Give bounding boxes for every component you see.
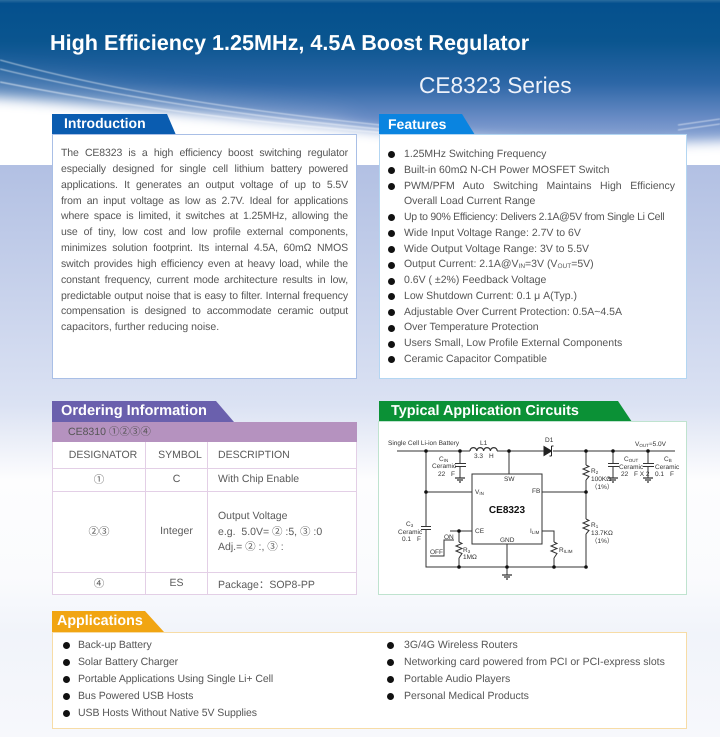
panel: applications bbox=[52, 611, 687, 729]
heading: introduction: Introduction bbox=[64, 115, 146, 131]
text block: introduction body: especially designed for single cell lithium battery powered bbox=[61, 163, 348, 175]
text block: introduction body: where space is limited, it switches at 1.25MHz, allowing the bbox=[61, 210, 348, 222]
circuit labels: （1%） bbox=[591, 537, 613, 545]
row: designator 4: Package：SOP8-PP bbox=[218, 579, 315, 591]
circuit labels: OFF bbox=[430, 549, 443, 556]
row: designator 1: ① bbox=[94, 474, 104, 486]
list: applications left: Solar Battery Charger bbox=[78, 656, 178, 668]
header row: DESIGNATOR bbox=[69, 449, 137, 461]
circuit labels: GND bbox=[500, 537, 515, 544]
circuit labels: Single Cell Li-ion Battery bbox=[388, 440, 460, 447]
circuit labels: R bbox=[559, 547, 564, 554]
list: applications left: Back-up Battery bbox=[78, 639, 152, 651]
feature list: 1.25MHz Switching Frequency bbox=[404, 148, 546, 160]
list: applications left: Bus Powered USB Hosts bbox=[78, 690, 193, 702]
circuit labels bbox=[388, 437, 680, 561]
feature list bbox=[388, 148, 675, 365]
circuit labels: OUT bbox=[629, 458, 638, 463]
text block: introduction body: predictable output noise that is easy to filter. Internal frequency bbox=[61, 290, 348, 302]
circuit labels: IN bbox=[479, 491, 484, 496]
circuit labels: 1 bbox=[596, 524, 599, 529]
circuit labels: 3 bbox=[468, 549, 471, 554]
heading: ordering information bbox=[52, 401, 234, 422]
list: applications right: 3G/4G Wireless Routers bbox=[404, 639, 518, 651]
circuit labels: V bbox=[635, 441, 639, 448]
circuit labels: 2 bbox=[596, 470, 599, 475]
ground symbols bbox=[455, 478, 653, 579]
heading: applications bbox=[52, 611, 164, 632]
list: applications right: Personal Medical Products bbox=[404, 690, 529, 702]
circuit labels: Ceramic bbox=[432, 463, 457, 470]
row: designator 4 bbox=[94, 577, 315, 591]
header row: DESCRIPTION bbox=[218, 449, 290, 461]
text block: introduction body: capacitors, further reducing noise. bbox=[61, 321, 219, 333]
inductor L1 bbox=[470, 448, 497, 451]
row: designators 2 and 3: Integer bbox=[160, 525, 193, 537]
feature list: Output Current: 2.1A@VIN=3V (VOUT=5V) bbox=[404, 258, 594, 270]
text block: introduction body: compensation is designed to accommodate ceramic output bbox=[61, 305, 348, 317]
chip: CE8323 bbox=[472, 474, 542, 544]
circuit labels: R bbox=[591, 522, 596, 529]
circuit labels: Ceramic bbox=[619, 464, 644, 471]
text block: introduction body: use of tiny, low cost and low profile external components, bbox=[61, 226, 348, 238]
circuit labels: LIM bbox=[532, 530, 540, 535]
heading: typical application circuits bbox=[379, 401, 632, 422]
feature list: Users Small, Low Profile External Components bbox=[404, 337, 622, 349]
part number band bbox=[52, 422, 357, 442]
circuit labels: F X 2 bbox=[634, 471, 650, 478]
circuit labels: B bbox=[669, 458, 672, 463]
applications box bbox=[52, 632, 687, 729]
resistors bbox=[456, 465, 589, 558]
feature list: Adjustable Over Current Protection: 0.5A~4.5A bbox=[404, 306, 622, 318]
circuit labels: D1 bbox=[545, 437, 554, 444]
circuit labels: SW bbox=[504, 476, 515, 483]
circuit labels: 13.7KΩ bbox=[591, 530, 613, 537]
circuit labels: （1%） bbox=[591, 483, 613, 491]
list: applications right: Networking card powered from PCI or PCI-express slots bbox=[404, 656, 665, 668]
row: designators 2 and 3: e.g. 5.0V= ② :5, ③ :0 bbox=[218, 526, 322, 538]
row: designator 4: ES bbox=[169, 577, 184, 589]
circuit labels: 1MΩ bbox=[463, 554, 477, 561]
circuit labels: 22 bbox=[438, 471, 446, 478]
part number band: CE8310 ①②③④ bbox=[68, 426, 151, 438]
chip: CE8323: CE8323 bbox=[489, 505, 526, 516]
panel: typical application circuits bbox=[378, 401, 687, 595]
heading: introduction bbox=[52, 114, 176, 135]
list: applications right bbox=[387, 639, 665, 702]
circuit labels: Ceramic bbox=[398, 529, 423, 536]
feature list: Low Shutdown Current: 0.1 μ A(Typ.) bbox=[404, 290, 577, 302]
feature list: Over Temperature Protection bbox=[404, 321, 539, 333]
feature list: Up to 90% Efficiency: Delivers 2.1A@5V from Single Li Cell bbox=[404, 211, 664, 223]
feature list: Built-in 60mΩ N-CH Power MOSFET Switch bbox=[404, 164, 609, 176]
panel: features bbox=[379, 114, 687, 379]
text block: introduction body: from an input voltage as low as 2.7V. Ideal for applications bbox=[61, 195, 348, 207]
heading: typical application circuits: Typical Application Circuits bbox=[391, 403, 579, 419]
ordering table bbox=[52, 442, 357, 595]
capacitors bbox=[421, 464, 654, 530]
text block: introduction body: constant frequency, current mode architecture results in low, bbox=[61, 274, 348, 286]
circuit labels: FB bbox=[532, 488, 540, 495]
panel: introduction bbox=[52, 114, 357, 379]
heading: features: Features bbox=[388, 116, 446, 132]
circuit labels: 3 bbox=[411, 523, 414, 528]
circuit labels: ON bbox=[444, 534, 454, 541]
row: designators 2 and 3: ②③ bbox=[88, 526, 110, 538]
circuit labels: Ceramic bbox=[655, 464, 680, 471]
list: applications left: USB Hosts Without Native 5V Supplies bbox=[78, 707, 257, 719]
list: applications left bbox=[63, 639, 273, 719]
row: designators 2 and 3: Output Voltage bbox=[218, 510, 287, 522]
circuit diagram bbox=[388, 437, 680, 580]
row: designators 2 and 3 bbox=[88, 510, 322, 553]
text block: introduction body: switch provides high efficiency even at heavy load, while the bbox=[61, 258, 348, 270]
heading: features bbox=[379, 114, 475, 135]
circuit labels: 22 bbox=[621, 471, 629, 478]
circuit box bbox=[378, 421, 687, 595]
heading: applications: Applications bbox=[57, 613, 143, 629]
subtitle: series name: CE8323 Series bbox=[419, 72, 572, 98]
circuit labels: CE bbox=[475, 528, 485, 535]
list: applications left: Portable Applications Using Single Li+ Cell bbox=[78, 673, 273, 685]
circuit labels: F bbox=[417, 536, 421, 543]
circuit labels: F bbox=[451, 471, 455, 478]
circuit labels: =5.0V bbox=[649, 441, 667, 448]
row: designator 1: With Chip Enable bbox=[218, 473, 299, 485]
circuit labels: R bbox=[591, 468, 596, 475]
feature list: Wide Output Voltage Range: 3V to 5.5V bbox=[404, 243, 589, 255]
circuit labels: ILIM bbox=[564, 549, 573, 554]
diode D1 bbox=[544, 446, 554, 456]
junction nodes bbox=[424, 449, 650, 569]
circuit labels: 3.3 bbox=[474, 453, 483, 460]
text block: introduction body: minimizes solution footprint. Its internal 4.5A, 60mΩ NMOS bbox=[61, 242, 348, 254]
text block: introduction body: applications. It generates an output voltage of up to 5.5V bbox=[61, 179, 348, 191]
circuit labels: 0.1 bbox=[402, 536, 411, 543]
panel: ordering information bbox=[52, 401, 357, 595]
circuit labels: L1 bbox=[480, 440, 488, 447]
circuit labels: V bbox=[475, 489, 479, 496]
row: designator 1 bbox=[94, 473, 299, 486]
circuit labels: C bbox=[624, 456, 629, 463]
header row: SYMBOL bbox=[158, 449, 202, 461]
row: designators 2 and 3: Adj.= ② :, ③ : bbox=[218, 541, 284, 553]
feature list: Overall Load Current Range bbox=[404, 195, 535, 207]
header row bbox=[69, 449, 290, 461]
circuit labels: C bbox=[664, 456, 669, 463]
feature box bbox=[379, 134, 687, 379]
circuit labels: OUT bbox=[639, 443, 649, 448]
circuit labels: 100KΩ bbox=[591, 476, 611, 483]
circuit labels: H bbox=[489, 453, 494, 460]
text block: introduction body bbox=[52, 134, 357, 379]
feature list: Ceramic Capacitor Compatible bbox=[404, 353, 547, 365]
circuit labels: C bbox=[439, 456, 444, 463]
feature list: 0.6V ( ±2%) Feedback Voltage bbox=[404, 274, 546, 286]
heading: ordering information: Ordering Information bbox=[61, 403, 207, 419]
list: applications right: Portable Audio Players bbox=[404, 673, 510, 685]
title: High Efficiency 1.25MHz, 4.5A Boost Regulator bbox=[50, 30, 529, 55]
text block: introduction body: The CE8323 is a high efficiency boost switching regulator bbox=[61, 147, 348, 159]
circuit labels: I bbox=[530, 528, 532, 535]
circuit labels: R bbox=[463, 547, 468, 554]
circuit labels: 0.1 bbox=[655, 471, 664, 478]
row: designator 1: C bbox=[173, 473, 180, 485]
feature list: Wide Input Voltage Range: 2.7V to 6V bbox=[404, 227, 581, 239]
feature list: PWM/PFM Auto Switching Maintains High Efficiency bbox=[404, 180, 675, 192]
circuit labels: IN bbox=[444, 458, 448, 463]
circuit labels: F bbox=[670, 471, 674, 478]
row: designator 4: ④ bbox=[94, 578, 104, 590]
circuit labels: C bbox=[406, 521, 411, 528]
